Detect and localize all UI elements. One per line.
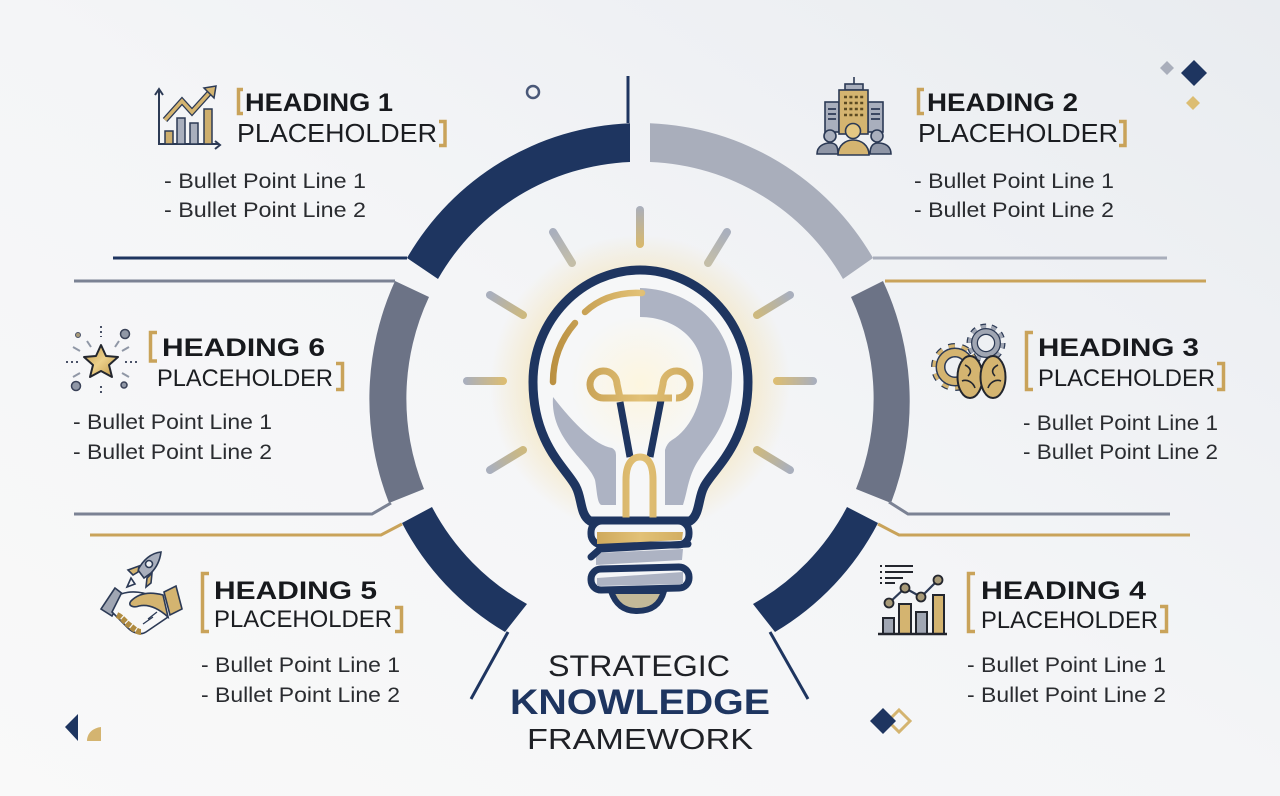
bullets 3: - Bullet Point Line 1 bbox=[1023, 411, 1218, 435]
gold highlights bbox=[553, 293, 642, 382]
ring segment 5: navy bbox=[402, 507, 527, 632]
block 4 bbox=[878, 566, 1166, 707]
heading 3: PLACEHOLDER bbox=[1038, 365, 1215, 392]
ring segment 3: slate bbox=[851, 281, 910, 503]
icon: rocket and handshake bbox=[101, 552, 182, 634]
ring segment 1: navy bbox=[407, 123, 630, 279]
title: FRAMEWORK bbox=[527, 724, 754, 756]
inner glass shading bbox=[553, 288, 732, 505]
bullets 3: - Bullet Point Line 2 bbox=[1023, 440, 1218, 464]
decoration: top ring bbox=[527, 86, 539, 98]
title bbox=[510, 650, 770, 756]
light rays bbox=[467, 210, 813, 470]
heading 3: HEADING 3 bbox=[1038, 334, 1199, 362]
bullets 4: - Bullet Point Line 2 bbox=[967, 683, 1166, 707]
bullets 1 bbox=[164, 169, 366, 222]
icon: office and team bbox=[817, 77, 891, 155]
filament bbox=[590, 371, 690, 518]
heading 1 bbox=[237, 89, 445, 148]
bullets 4 bbox=[967, 653, 1166, 707]
bullets 2: - Bullet Point Line 1 bbox=[914, 169, 1114, 193]
icon: star burst bbox=[66, 326, 137, 396]
decoration: bottom-left shapes bbox=[65, 714, 101, 741]
bullets 6: - Bullet Point Line 2 bbox=[73, 440, 272, 464]
bullets 2: - Bullet Point Line 2 bbox=[914, 198, 1114, 222]
block 1 bbox=[155, 86, 445, 222]
bullets 5: - Bullet Point Line 1 bbox=[201, 653, 400, 677]
segmented ring bbox=[369, 123, 910, 632]
bullets 6 bbox=[73, 410, 272, 464]
icon: gears and brain bbox=[935, 327, 1006, 398]
decoration: top-right diamonds bbox=[1160, 60, 1207, 110]
heading 6: PLACEHOLDER bbox=[157, 365, 333, 392]
bullets 3 bbox=[1023, 411, 1218, 464]
heading 4: PLACEHOLDER bbox=[981, 607, 1158, 634]
bullets 1: - Bullet Point Line 1 bbox=[164, 169, 366, 193]
ring segment 4: navy bbox=[753, 507, 878, 632]
screw base bbox=[591, 521, 689, 611]
bulb glass outline bbox=[533, 270, 748, 521]
decoration: bottom-right diamonds bbox=[870, 708, 910, 734]
bullets 4: - Bullet Point Line 1 bbox=[967, 653, 1166, 677]
bulb glow bbox=[490, 235, 790, 535]
bullets 6: - Bullet Point Line 1 bbox=[73, 410, 272, 434]
heading 6: HEADING 6 bbox=[162, 334, 325, 362]
heading 5: HEADING 5 bbox=[214, 577, 377, 605]
icon: analytics chart bbox=[878, 566, 947, 634]
block 5 bbox=[101, 552, 402, 707]
heading 2: PLACEHOLDER bbox=[918, 118, 1118, 148]
heading 3 bbox=[1026, 332, 1224, 392]
heading 1: PLACEHOLDER bbox=[237, 118, 437, 148]
icon: growth chart bbox=[155, 86, 220, 149]
connector lines bbox=[74, 76, 1206, 699]
heading 5 bbox=[202, 574, 402, 633]
block 6 bbox=[66, 326, 342, 464]
block 3 bbox=[935, 327, 1224, 464]
heading 4: HEADING 4 bbox=[981, 577, 1146, 605]
bullets 2 bbox=[914, 169, 1114, 222]
ring segment 2: light gray bbox=[650, 123, 873, 279]
light bulb bbox=[467, 210, 813, 611]
bullets 5: - Bullet Point Line 2 bbox=[201, 683, 400, 707]
heading 5: PLACEHOLDER bbox=[214, 606, 392, 633]
title: KNOWLEDGE bbox=[510, 683, 770, 722]
heading 6 bbox=[150, 332, 342, 392]
heading 2: HEADING 2 bbox=[927, 89, 1078, 117]
bullets 5 bbox=[201, 653, 400, 707]
heading 1: HEADING 1 bbox=[245, 89, 393, 117]
title: STRATEGIC bbox=[548, 650, 730, 683]
ring segment 6: slate bbox=[369, 281, 429, 503]
heading 4 bbox=[968, 574, 1166, 634]
heading 2 bbox=[918, 89, 1125, 148]
bullets 1: - Bullet Point Line 2 bbox=[164, 198, 366, 222]
block 2 bbox=[817, 77, 1125, 222]
